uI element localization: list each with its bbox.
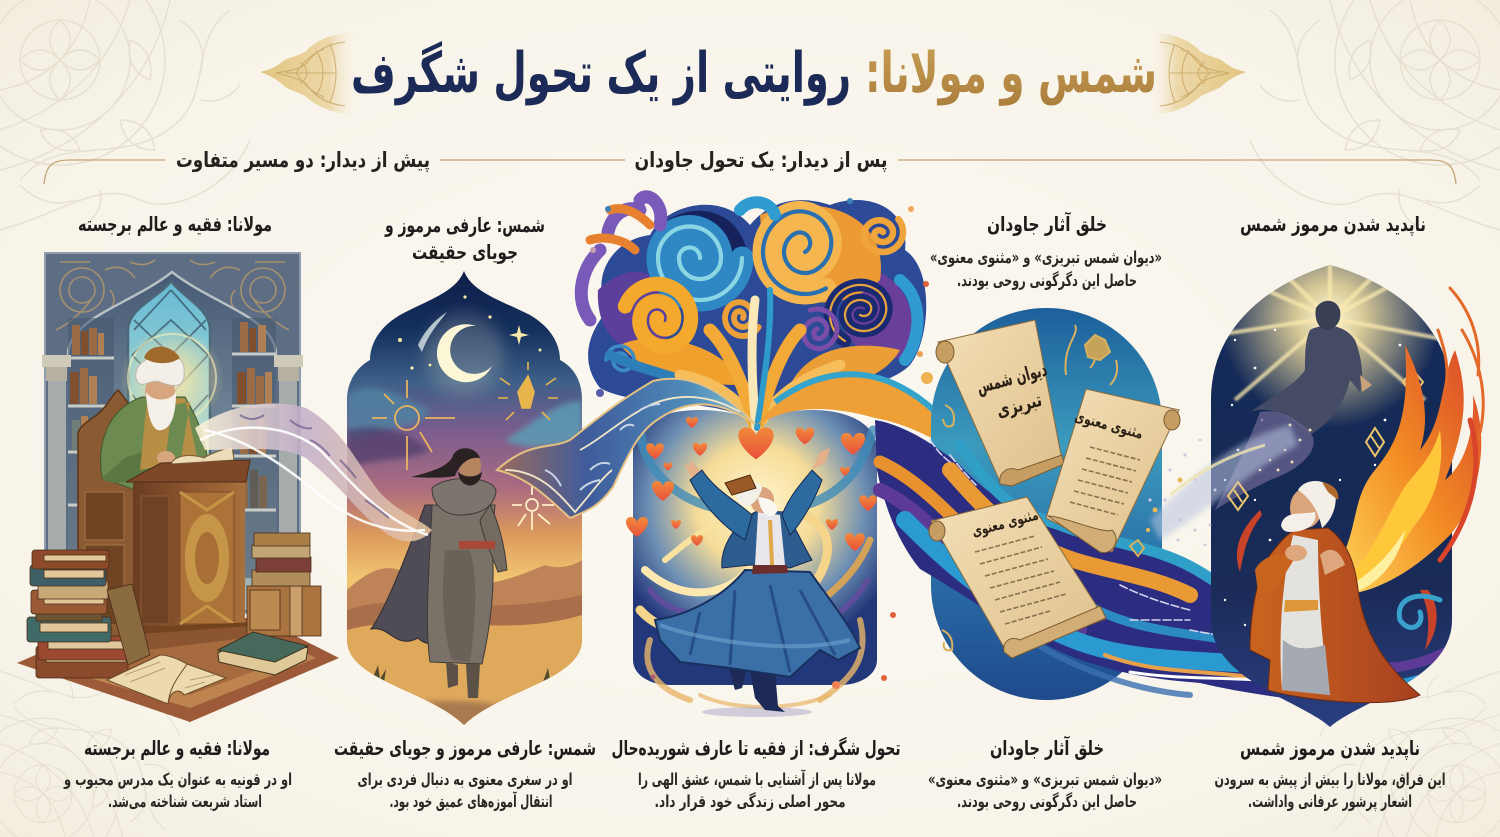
scroll: Masnavi back bbox=[1046, 389, 1180, 553]
swirls inside arch bbox=[640, 430, 873, 707]
caption: transformation bbox=[612, 736, 900, 812]
arched room interior bbox=[68, 272, 276, 610]
caption: Molana: مولانا: فقیه و عالم برجسته bbox=[84, 736, 270, 760]
dust stream leaving arch bbox=[1146, 425, 1298, 546]
scroll: Divan bbox=[936, 320, 1064, 486]
caption: immortal works: حاصل این دگرگونی روحی بودند. bbox=[957, 791, 1137, 812]
ribbon: Shams to center bbox=[497, 379, 755, 518]
starburst bbox=[1226, 265, 1438, 424]
clouds bbox=[347, 387, 582, 481]
caption: disappearance: ناپدید شدن مرموز شمس bbox=[1240, 736, 1420, 761]
fading dust trail bbox=[1215, 411, 1314, 510]
book shelves bbox=[68, 318, 276, 578]
open book on lectern bbox=[172, 446, 234, 464]
scroll: Masnavi front: مثنوی معنوی bbox=[970, 506, 1040, 540]
caption: immortal works: «دیوان شمس تبریزی» و «مثنوی معنوی» bbox=[928, 770, 1162, 790]
scroll: Divan: تبریزی bbox=[994, 389, 1044, 422]
ornate frame bbox=[45, 253, 300, 613]
star field bbox=[1224, 329, 1421, 626]
caption: transformation: محور اصلی زندگی خود قرار داد. bbox=[654, 791, 846, 812]
scroll: Divan: دیوان شمس bbox=[974, 358, 1050, 398]
carpet bbox=[17, 618, 339, 722]
window bbox=[128, 281, 210, 480]
top heading: immortal works: خلق آثار جاودان bbox=[987, 211, 1107, 236]
top heading: Shams: شمس: عارفی مرموز و bbox=[384, 213, 545, 237]
caption: transformation: مولانا پس از آشنایی با شمس، عشق الهی را bbox=[638, 768, 876, 790]
ribbon: Molana to Shams bbox=[195, 403, 432, 541]
caption: Shams: او در سغری معنوی به دنبال فردی برای bbox=[358, 770, 572, 790]
Molana looking up bbox=[1250, 481, 1420, 703]
top heading: immortal works: «دیوان شمس تبریزی» و «مثنوی معنوی» bbox=[930, 248, 1162, 268]
top heading: immortal works: حاصل این دگرگونی روحی بودند. bbox=[957, 270, 1137, 291]
caption: Molana bbox=[63, 736, 292, 812]
flowing river bbox=[875, 420, 1400, 702]
caption: disappearance bbox=[1214, 736, 1446, 812]
swirling cloud bbox=[581, 197, 985, 717]
title: روایتی از یک تحول شگرف bbox=[351, 41, 851, 106]
round background bbox=[931, 308, 1162, 700]
lectern bbox=[126, 460, 260, 650]
top heading: Shams: جویای حقیقت bbox=[412, 240, 518, 264]
title ornament left bbox=[260, 32, 358, 115]
Molana figure bbox=[101, 347, 208, 490]
columns bbox=[42, 355, 303, 595]
warm wisps bbox=[1237, 510, 1437, 650]
flames bbox=[1335, 288, 1483, 595]
arch background bbox=[633, 410, 877, 685]
book stack right bbox=[247, 533, 321, 636]
top heading: Shams bbox=[384, 213, 545, 264]
caption: Shams bbox=[334, 736, 596, 812]
paint droplets bbox=[590, 198, 933, 689]
caption: Shams: شمس: عارفی مرموز و جویای حقیقت bbox=[334, 736, 596, 760]
top heading: immortal works bbox=[930, 211, 1162, 291]
whirling dervish bbox=[655, 448, 860, 717]
dunes bbox=[347, 560, 582, 730]
ascending figure bbox=[1250, 301, 1372, 435]
caption: Molana: او در قونیه به عنوان یک مدرس محبوب و bbox=[63, 770, 292, 790]
panel: Shams wanderer bbox=[340, 265, 590, 730]
open book on floor bbox=[107, 655, 226, 704]
section header: after the meeting: پس از دیدار: یک تحول جاودان bbox=[634, 148, 888, 172]
hearts bbox=[626, 417, 877, 551]
top heading: disappearance: ناپدید شدن مرموز شمس bbox=[1240, 212, 1426, 237]
book stack left bbox=[27, 550, 150, 678]
caption: immortal works: خلق آثار جاودان bbox=[990, 735, 1104, 760]
gold ornaments bbox=[942, 325, 1144, 650]
caption: disappearance: اشعار پرشور عرفانی واداشت. bbox=[1248, 792, 1412, 812]
swirl lower right bbox=[1399, 596, 1440, 628]
gold glyph icons bbox=[1228, 370, 1423, 510]
halo bbox=[120, 326, 224, 430]
closed book on floor bbox=[218, 632, 308, 675]
panel: Molana scholar bbox=[17, 253, 339, 722]
chair bbox=[78, 390, 158, 645]
section header lines bbox=[44, 160, 1456, 184]
stars and mystic symbols bbox=[372, 295, 558, 530]
panel: disappearance of Shams bbox=[1146, 265, 1485, 727]
panel: immortal works bbox=[875, 308, 1400, 702]
caption: immortal works bbox=[928, 735, 1162, 812]
chair panels bbox=[85, 492, 124, 625]
caption: Shams: انتقال آموزه‌های عمیق خود بود. bbox=[390, 790, 552, 812]
title: شمس و مولانا: bbox=[865, 41, 1157, 106]
panel: transformation center bbox=[63, 197, 1483, 812]
section header: before the meeting: پیش از دیدار: دو مسیر متفاوت bbox=[176, 148, 430, 172]
scroll: Masnavi front bbox=[929, 497, 1106, 658]
lower right swoosh bbox=[1388, 646, 1446, 683]
Shams figure bbox=[371, 448, 507, 698]
top heading: Molana: مولانا: فقیه و عالم برجسته bbox=[78, 212, 272, 236]
title ornament right bbox=[1148, 32, 1246, 115]
crescent moon bbox=[424, 314, 504, 394]
caption: transformation: تحول شگرف: از فقیه تا عارف شوریده‌حال bbox=[612, 736, 900, 760]
caption: Molana: استاد شریعت شناخته می‌شد. bbox=[108, 792, 262, 812]
scroll: Masnavi back: مثنوی معنوی bbox=[1073, 407, 1145, 443]
stream to the right bbox=[757, 374, 985, 480]
